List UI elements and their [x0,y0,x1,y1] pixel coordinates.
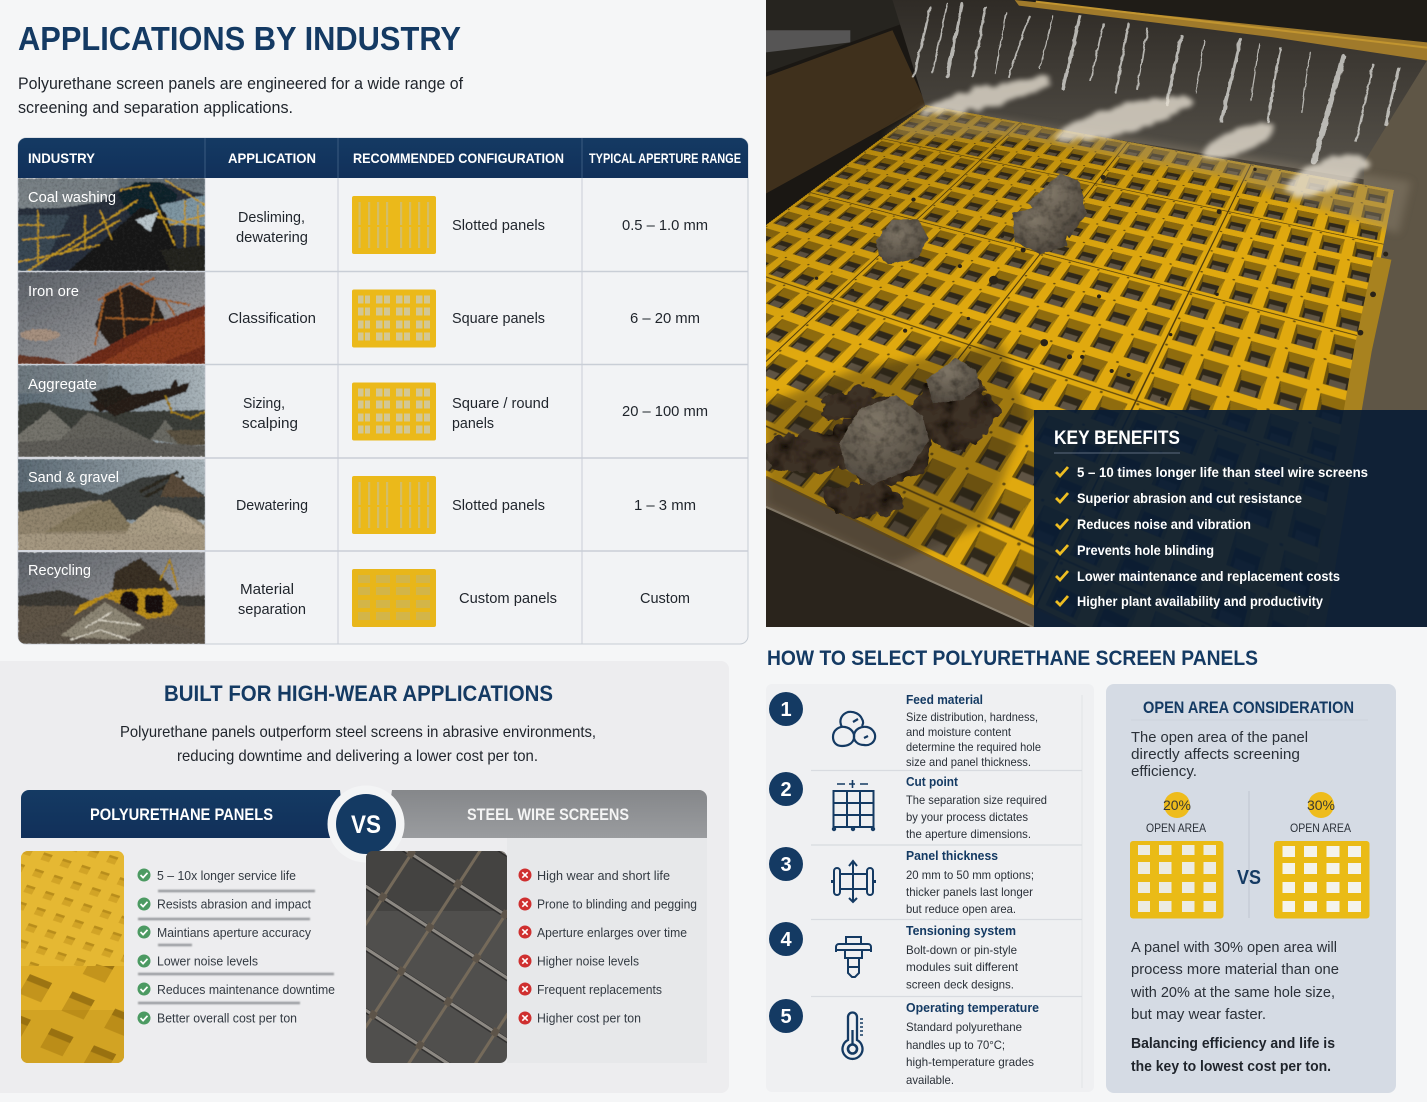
near frame edge [766,477,1076,627]
number badge: 2 [780,779,792,801]
icon: rocks [833,712,875,746]
number badge [769,922,803,956]
photo: steel wire mesh [366,851,507,1063]
benefit 1: 5 – 10 times longer life than steel wire screens [1077,464,1368,480]
photo: aggregate [18,365,205,457]
configuration text: Slotted panels [452,497,545,514]
step text: Bolt-down or pin-style [906,943,1017,957]
step text [906,1000,1039,1087]
row: aggregate [18,365,708,457]
number badge: 3 [780,854,792,876]
row: iron ore [18,272,700,364]
number badge [769,847,803,881]
icon: thickness arrows [832,861,875,902]
option: 20 percent open area [1130,792,1224,918]
step text [906,848,1034,916]
title: APPLICATIONS BY INDUSTRY [18,20,461,57]
header: steel wire screens: STEEL WIRE SCREENS [467,805,629,824]
right frame edge [1316,258,1383,627]
step text: screen deck designs. [906,978,1014,992]
explanation text [1130,939,1339,1023]
step text: the aperture dimensions. [906,827,1031,841]
step text: The separation size required [906,793,1047,807]
heading: KEY BENEFITS [1054,428,1180,449]
number badge [769,772,803,806]
aperture range: 6 – 20 mm [630,310,700,327]
application text: scalping [242,415,298,432]
list: polyurethane benefits [138,868,335,1026]
explanation text: A panel with 30% open area will [1131,939,1337,956]
panel sample 30% [1274,841,1370,918]
table header: APPLICATION [228,150,316,166]
number badge: 1 [780,699,792,721]
step text: Feed material [906,692,983,707]
item 3: Aperture enlarges over time [537,925,687,940]
step text: and moisture content [906,725,1012,739]
step text: Tensioning system [906,923,1016,938]
item 5: Reduces maintenance downtime [157,982,335,997]
step text: Standard polyurethane [906,1020,1022,1034]
intro text: Polyurethane screen panels are engineered for a wide range of [18,74,463,93]
intro text [1131,729,1308,780]
photo: sand and gravel [18,459,205,551]
rocks [839,173,1086,485]
explanation text: but may wear faster. [1131,1006,1266,1023]
icon: aperture grid [833,780,874,830]
explanation text: with 20% at the same hole size, [1130,984,1335,1001]
step text: available. [906,1073,954,1087]
step text [906,923,1019,992]
step text: Size distribution, hardness, [906,710,1038,724]
benefit 5: Lower maintenance and replacement costs [1077,568,1340,584]
step text: determine the required hole [906,740,1041,754]
subheading: reducing downtime and delivering a lower cost per ton. [177,748,538,765]
step text: by your process dictates [906,810,1028,824]
VS label: VS [1237,867,1261,889]
number badge: 5 [780,1006,792,1028]
label: sand and gravel: Sand & gravel [28,469,119,486]
conclusion text: Balancing efficiency and life is [1131,1035,1335,1052]
application text: Material [240,581,294,598]
item 4: Higher noise levels [537,954,639,968]
panel sample 20% [1130,841,1224,918]
application text [242,395,298,432]
column: steel wire backdrop [507,838,707,1063]
step text: but reduce open area. [906,902,1016,916]
explanation text: process more material than one [1131,961,1339,978]
photo: polyurethane surface [21,851,124,1063]
option: 30 percent open area: OPEN AREA [1290,821,1351,835]
heading: BUILT FOR HIGH-WEAR APPLICATIONS [164,681,553,706]
step text: 20 mm to 50 mm options; [906,868,1034,882]
square panel image [352,290,436,348]
table header [18,138,748,178]
icon: thermometer [843,1012,863,1059]
step text: thicker panels last longer [906,885,1033,899]
conclusion text: the key to lowest cost per ton. [1131,1058,1331,1075]
table header: INDUSTRY [28,150,96,166]
water spray [917,71,1374,205]
number badge [769,692,803,726]
item 2: Prone to blinding and pegging [537,896,697,912]
application text [236,209,308,246]
label: aggregate: Aggregate [28,376,97,393]
photo: recycling [18,552,205,644]
panel: open area consideration [1106,684,1396,1093]
label: recycling: Recycling [28,562,91,579]
slotted panel image [352,476,436,534]
table header: RECOMMENDED CONFIGURATION [353,150,564,166]
step text: handles up to 70°C; [906,1038,1005,1052]
row: recycling [18,552,690,644]
photo: iron ore [18,272,205,364]
top rail [1015,0,1427,60]
item 1: 5 – 10x longer service life [157,868,296,883]
subheading [120,724,596,765]
icon: bolt [836,937,872,977]
header: polyurethane panels: POLYURETHANE PANELS [90,805,273,824]
far deck wash [884,107,1411,234]
header: polyurethane panels [21,790,345,838]
step text: high-temperature grades [906,1055,1034,1069]
subheading: Polyurethane panels outperform steel screens in abrasive environments, [120,724,596,741]
configuration text [452,395,549,432]
application text [238,581,306,618]
step 2: cut point [769,772,1047,841]
item 4: Lower noise levels [157,954,258,968]
item 3: Maintians aperture accuracy [157,925,311,940]
panel: applications table [18,138,748,644]
item 2: Resists abrasion and impact [157,896,311,912]
panel: key benefits [1034,410,1427,627]
aperture range: 0.5 – 1.0 mm [622,217,708,234]
configuration text: Square / round [452,395,549,412]
configuration text: Slotted panels [452,217,545,234]
header: steel wire screens [385,790,707,838]
step text [906,692,1041,769]
badge 30%: 30% [1307,797,1335,813]
application text: Dewatering [236,497,308,514]
photo: coal washing [18,178,205,271]
step 5: operating temperature [769,999,1039,1087]
debris dots [815,168,1388,401]
VS badge: VS [351,811,381,839]
heading: OPEN AREA CONSIDERATION [1143,698,1354,717]
row: sand and gravel [18,459,696,551]
number badge [769,999,803,1033]
conclusion text [1131,1035,1335,1075]
step 1: feed material [769,692,1041,769]
application text: Sizing, [243,395,285,412]
intro text: screening and separation applications. [18,98,293,117]
step text: Panel thickness [906,848,998,863]
aperture range: Custom [640,590,690,607]
mud clump [767,375,996,517]
hero scene details [766,0,1427,627]
application text: separation [238,601,306,618]
application text: dewatering [236,229,308,246]
step text: modules suit different [906,960,1019,974]
benefit 6: Higher plant availability and productivity [1077,593,1323,609]
intro text: The open area of the panel [1131,729,1308,746]
step text: size and panel thickness. [906,755,1031,769]
configuration text: Custom panels [459,590,557,607]
label: coal washing: Coal washing [28,189,116,206]
panel: built for high-wear applications [0,661,729,1093]
aperture range: 1 – 3 mm [634,497,696,514]
hero photo: polyurethane screen deck [766,0,1427,627]
aperture range: 20 – 100 mm [622,403,708,420]
item 6: Better overall cost per ton [157,1010,297,1026]
step text: Operating temperature [906,1000,1039,1015]
configuration text: panels [452,415,494,432]
row: coal washing [18,178,708,271]
step 4: tensioning system [769,922,1019,992]
intro text [18,74,463,117]
falling water [914,4,1398,161]
heading: how to select: HOW TO SELECT POLYURETHANE SCREEN PANELS [767,647,1258,670]
list: steel wire drawbacks [518,868,697,1026]
intro text: directly affects screening [1131,746,1300,763]
item 1: High wear and short life [537,868,670,883]
step text [906,774,1047,841]
step text: Cut point [906,774,959,789]
option: 30 percent open area [1274,792,1370,918]
configuration text: Square panels [452,310,545,327]
table header: TYPICAL APERTURE RANGE [589,150,741,166]
item 6: Higher cost per ton [537,1010,641,1026]
step 3: panel thickness [769,847,1034,916]
mud around rocks [766,343,1027,565]
benefit 4: Prevents hole blinding [1077,542,1214,558]
item 5: Frequent replacements [537,982,662,997]
slotted panel image [352,196,436,254]
label: iron ore: Iron ore [28,283,79,300]
VS badge [328,786,404,862]
benefit 2: Superior abrasion and cut resistance [1077,490,1302,506]
option: 20 percent open area: OPEN AREA [1146,821,1206,835]
custom panel image [352,569,436,627]
dark area behind rail [1015,0,1427,42]
badge 20%: 20% [1163,797,1191,813]
panel: selection steps [766,684,1094,1092]
intro text: efficiency. [1131,763,1197,780]
benefit 3: Reduces noise and vibration [1077,516,1251,532]
application text: Classification [228,310,316,327]
number badge: 4 [780,929,792,951]
square round panel image [352,382,436,440]
application text: Desliming, [238,209,305,226]
